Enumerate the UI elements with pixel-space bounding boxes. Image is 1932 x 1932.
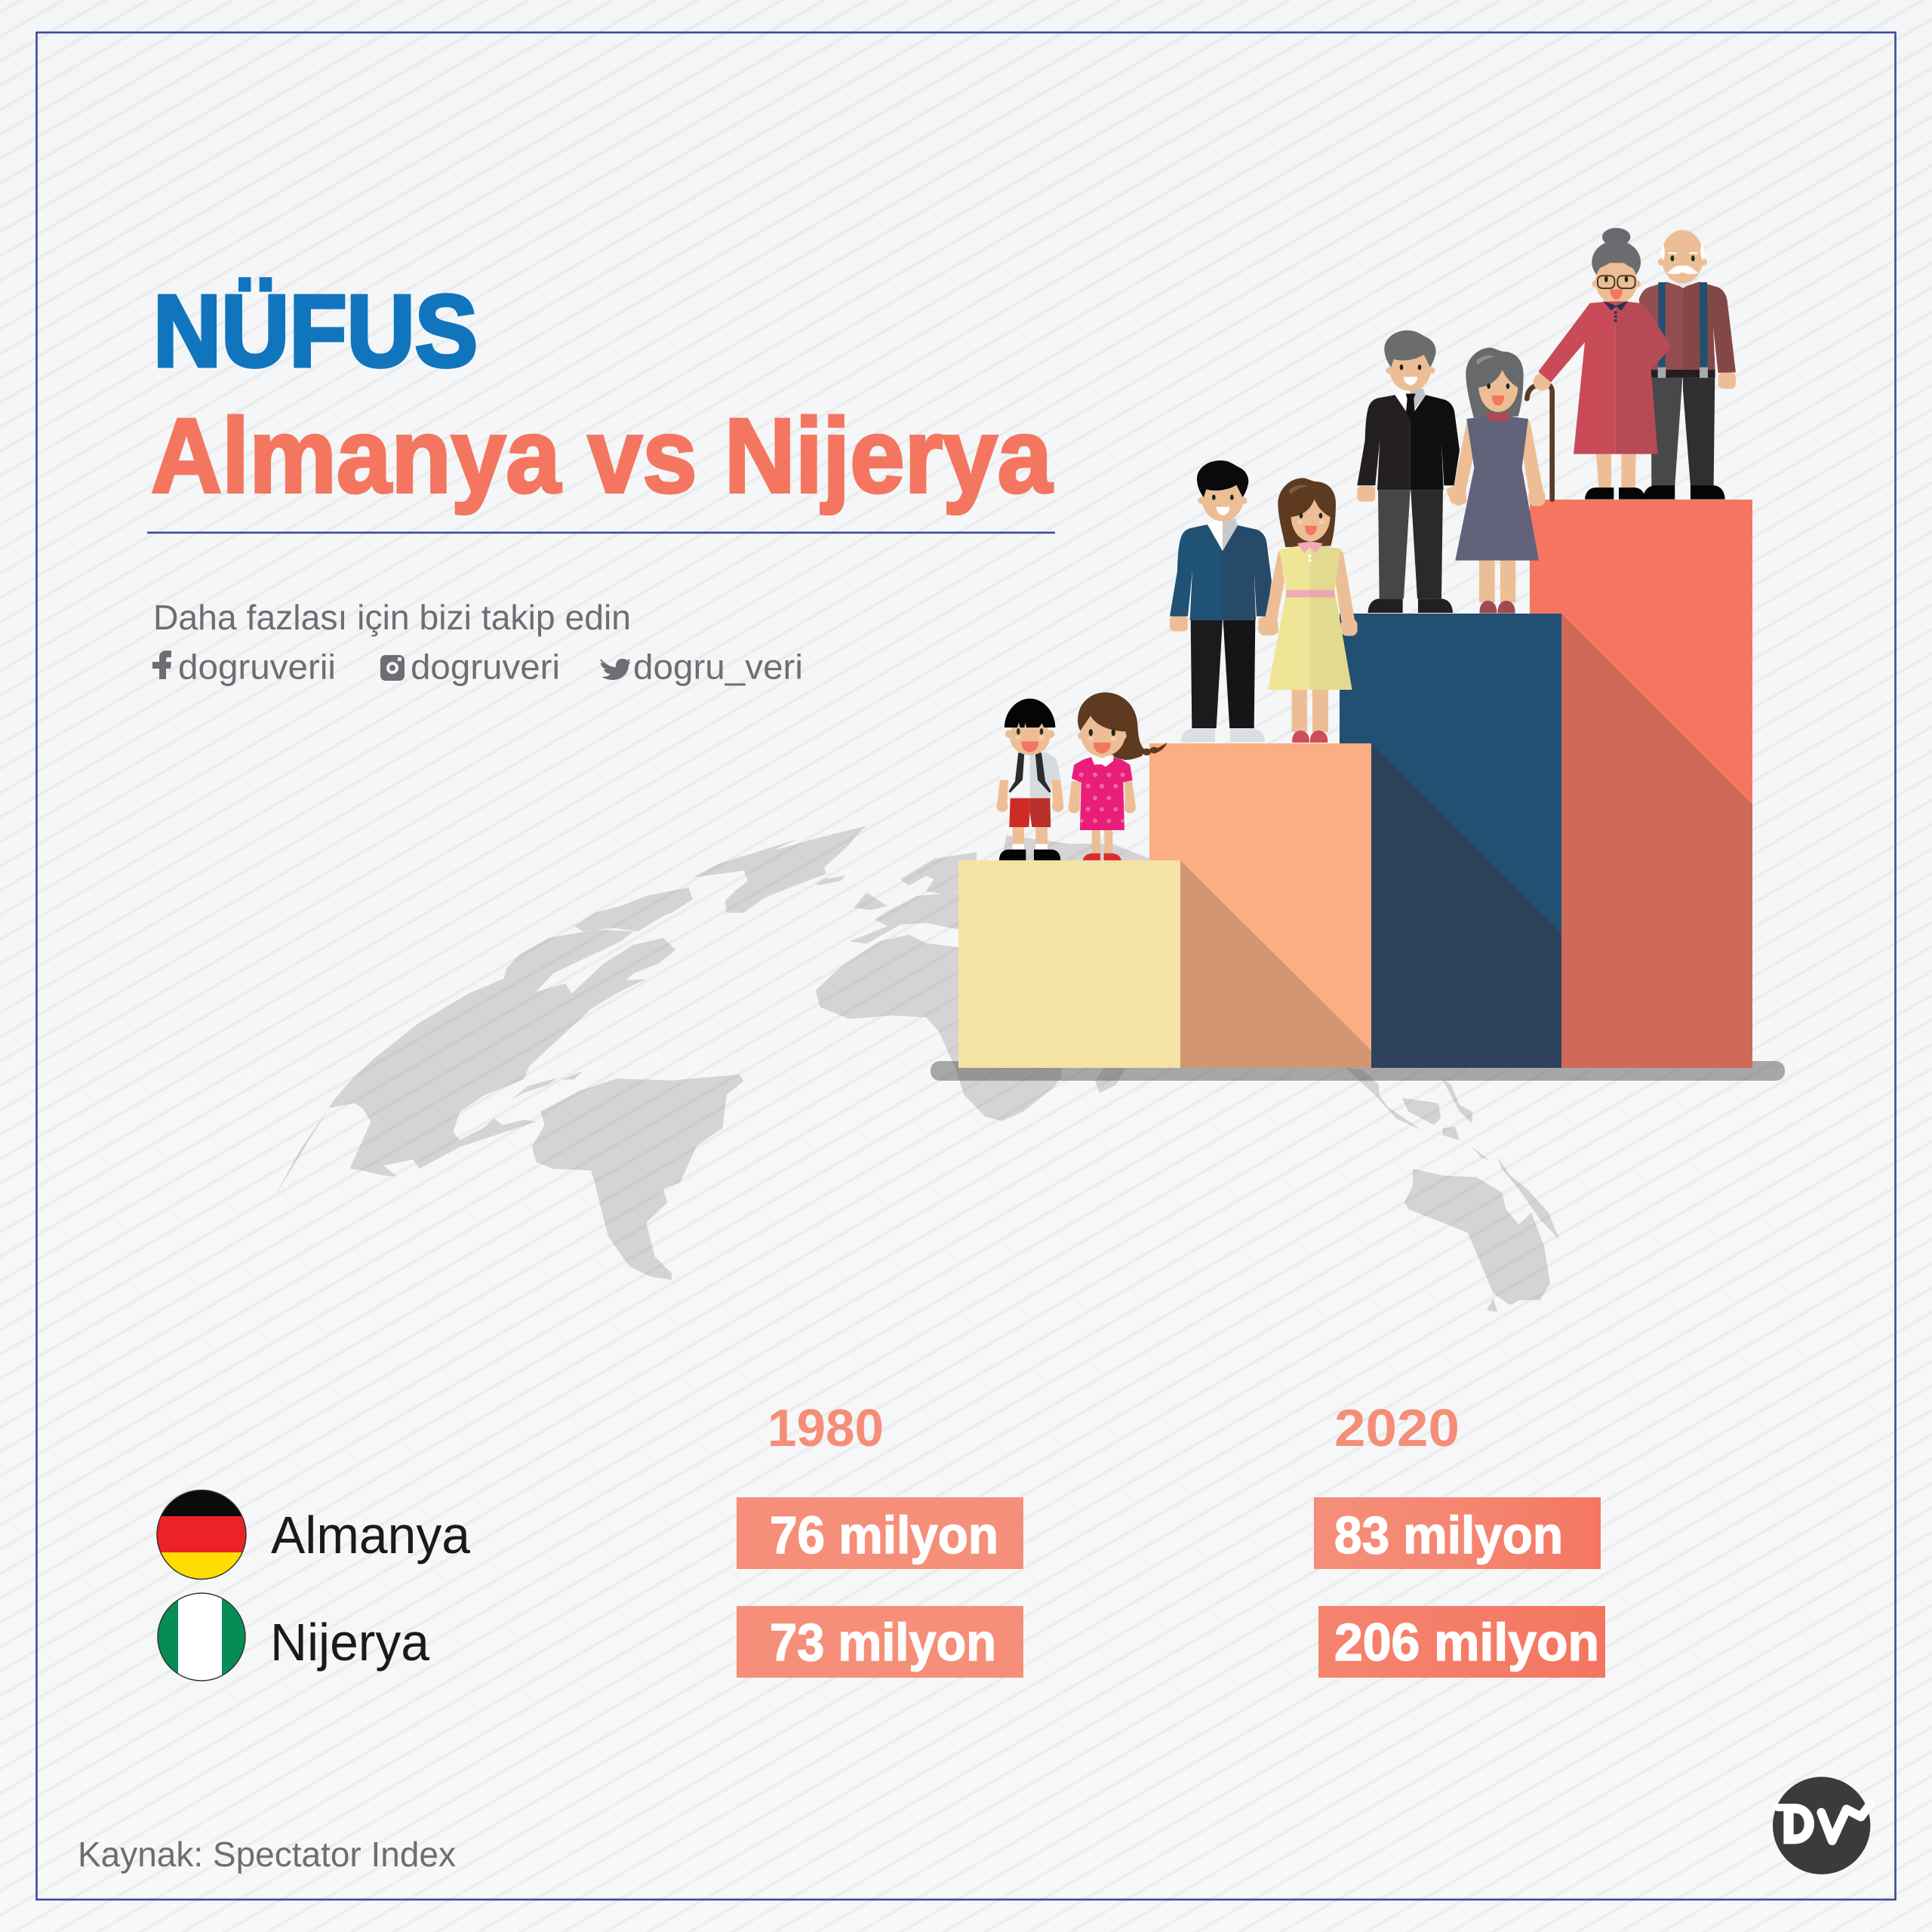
value box: 73 milyon	[737, 1606, 1023, 1678]
figure: grandfather	[1639, 230, 1736, 500]
world map	[275, 826, 1559, 1312]
flag outline: Germany	[157, 1490, 246, 1579]
source note: Kaynak: Spectator Index	[78, 1835, 456, 1874]
flag: Germany	[157, 1490, 246, 1580]
figure: young man	[1170, 460, 1278, 742]
icon: twitter	[601, 659, 631, 680]
title rule	[147, 531, 1055, 534]
step: peach	[1149, 743, 1371, 1068]
row: Almanya	[157, 1490, 1601, 1580]
flag: Nigeria	[157, 1593, 246, 1681]
subtitle: Almanya vs Nijerya: Almanya vs Nijerya	[151, 396, 1053, 515]
label: Nijerya: Nijerya	[270, 1613, 429, 1672]
figure: middle-aged man	[1357, 331, 1460, 613]
figure: grandmother	[1527, 228, 1672, 500]
year heading: 1980: 1980	[768, 1398, 884, 1457]
instagram handle: dogruveri	[411, 648, 560, 687]
value box: 83 milyon	[1314, 1497, 1601, 1569]
year heading: 2020: 2020	[1334, 1398, 1460, 1457]
step: coral	[1530, 500, 1752, 1068]
shadow on navy	[1371, 743, 1561, 1068]
shadow on coral	[1561, 614, 1752, 1068]
flag outline: Nigeria	[158, 1593, 245, 1681]
value box: 76 milyon	[737, 1497, 1023, 1569]
icon: facebook	[152, 651, 171, 679]
follow us text: Daha fazlası için bizi takip edin	[153, 598, 631, 637]
value: 76 milyon: 76 milyon	[770, 1506, 998, 1564]
social handles	[152, 648, 803, 687]
figure: girl	[1069, 692, 1168, 860]
twitter handle: dogru_veri	[633, 648, 803, 687]
row: Nijerya	[157, 1593, 1605, 1681]
figure: boy	[996, 699, 1063, 860]
step: navy	[1340, 614, 1561, 1068]
step: yellow	[958, 860, 1180, 1068]
logo: DV	[1773, 1777, 1870, 1875]
title: NÜFUS: NÜFUS	[153, 274, 478, 388]
shelf	[931, 1061, 1785, 1081]
label: Almanya: Almanya	[271, 1506, 470, 1564]
shadow on peach	[1180, 860, 1371, 1068]
value: 73 milyon: 73 milyon	[770, 1613, 996, 1672]
figure: middle-aged woman	[1446, 348, 1545, 614]
figure: young woman	[1258, 478, 1358, 743]
value box: 206 milyon	[1318, 1606, 1605, 1678]
value: 83 milyon: 83 milyon	[1334, 1506, 1563, 1564]
icon: instagram	[380, 655, 405, 681]
value: 206 milyon: 206 milyon	[1334, 1613, 1599, 1672]
staircase chart	[931, 500, 1785, 1081]
facebook handle: dogruverii	[178, 648, 336, 687]
